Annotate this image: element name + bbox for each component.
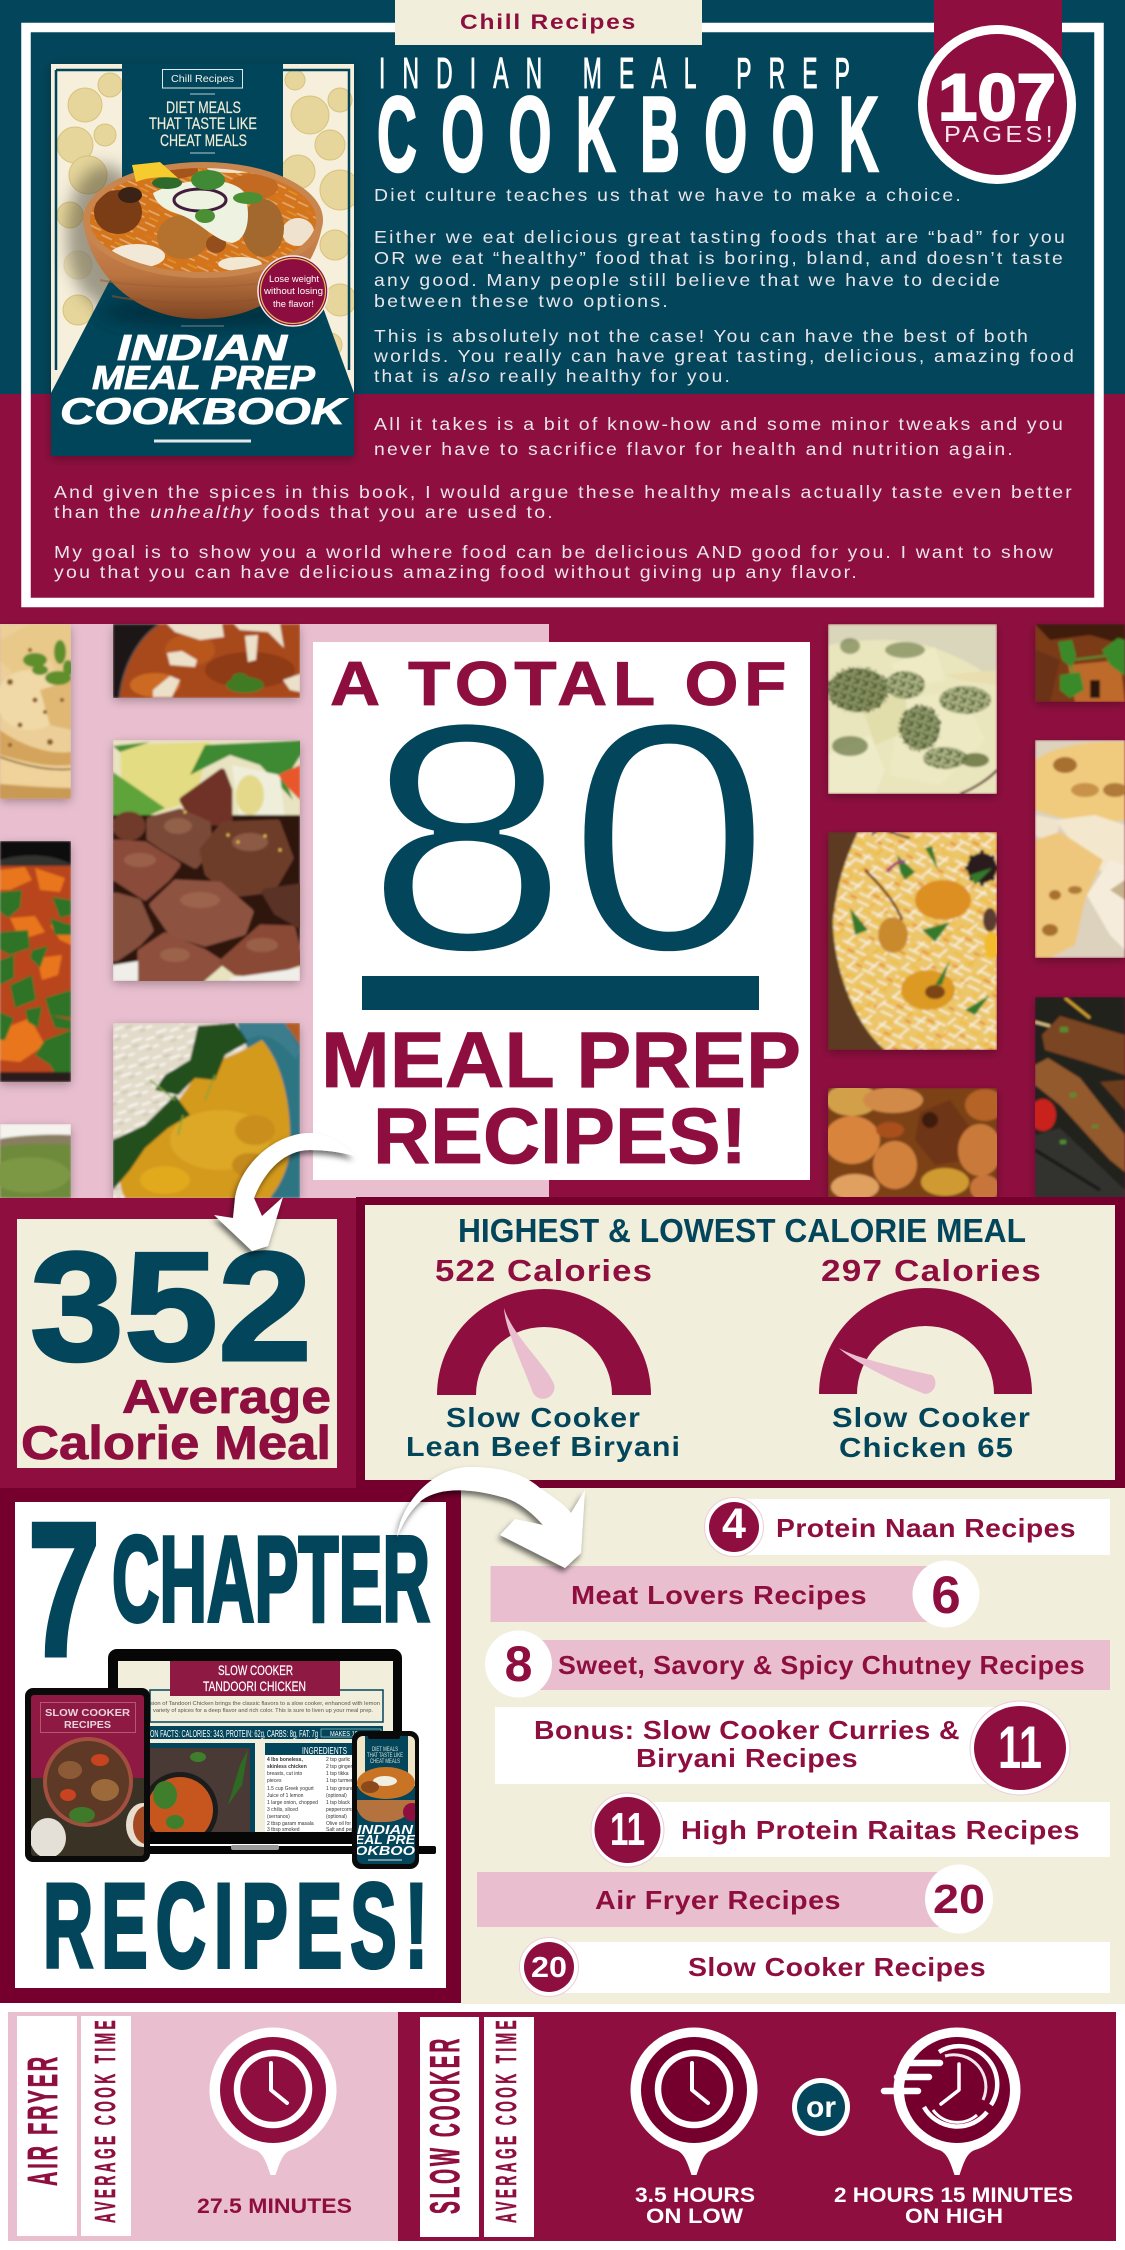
photo: dumplings with dill [826, 624, 997, 794]
arrow: recipes to average calories [214, 1133, 355, 1251]
tablet [25, 1688, 160, 1862]
row: bonus curries: 11 [998, 1714, 1042, 1781]
slow cooker side labels [420, 2017, 534, 2237]
laptop: (optional) [326, 1793, 347, 1799]
slow cooker high time [834, 2184, 1073, 2228]
photo: dal with rice [113, 1023, 300, 1198]
row: bonus curries: Biryani Recipes [636, 1743, 858, 1773]
laptop: 2 tsp ginger [326, 1764, 352, 1770]
average number: 352 [30, 1220, 312, 1393]
heading: meal prep recipes: RECIPES! [373, 1091, 747, 1180]
air fryer time: 27.5 MINUTES [197, 2195, 352, 2218]
panel: header introduction [0, 0, 1125, 624]
photo: biryani rice [828, 831, 1000, 1050]
row: meat lovers [490, 1560, 980, 1628]
photo: beef bites [113, 740, 310, 981]
intro copy: that is also really healthy for you. [374, 366, 732, 386]
cover tagline: DIET MEALS [166, 98, 241, 117]
intro copy: than the unhealthy foods that you are used to. [54, 502, 555, 522]
cover stamp: Lose weight [269, 274, 319, 285]
laptop: 2 tsp garlic [326, 1757, 351, 1763]
panel: average cook times [8, 2012, 1116, 2241]
panel: 7 chapter recipes [0, 1484, 461, 2003]
slow cooker low time: ON LOW [646, 2205, 743, 2228]
icon: fast clock pin [884, 2028, 1020, 2175]
photo: chicken 65 [824, 1084, 1005, 1201]
intro copy: you that you can have delicious amazing food without giving up any flavor. [54, 562, 859, 582]
photo: green chutney [0, 1124, 71, 1198]
infographic page: AVERAGE COOK TIME [491, 2017, 523, 2223]
laptop: 1 tsp ground [326, 1786, 354, 1792]
panel heading: HIGHEST & LOWEST CALORIE MEAL [458, 1212, 1026, 1249]
icon: low clock pin [630, 2028, 758, 2175]
brand tab [395, 0, 702, 45]
row: air fryer: Air Fryer Recipes [595, 1885, 841, 1915]
book cover [51, 64, 360, 456]
laptop: 4 lbs boneless, [267, 1757, 303, 1763]
phone: INDIAN [357, 1822, 414, 1837]
row: raitas: 11 [610, 1803, 645, 1855]
intro copy: Diet culture teaches us that we have to make a choice. [374, 185, 963, 205]
laptop: MAKES 10 SERV [330, 1731, 375, 1738]
icon: or badge [792, 2078, 850, 2136]
photo: dark curry [1035, 624, 1125, 702]
row: chutney: Sweet, Savory & Spicy Chutney Recipes [558, 1650, 1085, 1680]
gauge: highest: Slow Cooker [446, 1402, 641, 1433]
row: chutney: 8 [505, 1636, 532, 1692]
page count ribbon and badge: PAGES! [944, 121, 1056, 147]
laptop: 3 chilis, sliced [267, 1807, 298, 1813]
slow cooker low time: 3.5 HOURS [635, 2184, 755, 2207]
laptop: TANDOORI CHICKEN [203, 1678, 306, 1694]
heading: 7 chapter [28, 1484, 430, 1696]
laptop: 1 large onion, chopped [267, 1800, 318, 1806]
tablet: RECIPES [64, 1720, 111, 1731]
photo: paneer curry [0, 841, 71, 1082]
gauge: highest [406, 1253, 681, 1462]
row: raitas: High Protein Raitas Recipes [681, 1815, 1080, 1845]
laptop [108, 1649, 436, 1854]
panel: recipe total card [313, 642, 810, 1180]
row: chutney [485, 1630, 1110, 1698]
intro copy: My goal is to show you a world where food can be delicious AND good for you. I want to show [54, 542, 1055, 562]
phone: DIET MEALS [372, 1747, 398, 1753]
intro copy [54, 185, 1076, 582]
laptop: variety of spices for a deep flavor and rich color. This is sure to liven up your meal prep. [153, 1708, 373, 1714]
slow cooker high time: 2 HOURS 15 MINUTES [834, 2184, 1073, 2207]
panel: average calorie meal [0, 1198, 356, 1488]
title [377, 49, 903, 194]
cover title [62, 334, 350, 425]
intro copy: This is absolutely not the case! You can have the best of both [374, 326, 1030, 346]
average label [21, 1370, 331, 1469]
row: air fryer: 20 [933, 1876, 985, 1922]
cover stamp [258, 256, 328, 326]
device mockups [25, 1649, 436, 1869]
cover tagline: THAT TASTE LIKE [149, 114, 257, 133]
phone: CHEAT MEALS [370, 1759, 400, 1765]
row: slow cooker: Slow Cooker Recipes [688, 1952, 986, 1982]
laptop: Juice of 1 lemon [267, 1793, 304, 1799]
photo: cheese naan [1035, 740, 1125, 958]
intro copy: between these two options. [374, 291, 670, 311]
row: protein naan [704, 1498, 1110, 1556]
slow cooker high time: ON HIGH [905, 2205, 1003, 2228]
gauge: lowest: Slow Cooker [832, 1402, 1031, 1433]
page count ribbon and badge [922, 0, 1072, 180]
tablet: SLOW COOKER [45, 1708, 131, 1719]
brand tab: Chill Recipes [460, 11, 637, 34]
gauge: highest: 522 Calories [435, 1253, 653, 1288]
laptop: peppercorns [326, 1807, 354, 1813]
laptop: SLOW COOKER [218, 1662, 293, 1678]
row: protein naan: 4 [722, 1500, 746, 1548]
row: slow cooker: 20 [531, 1952, 567, 1984]
air fryer side labels: AIR FRYER [19, 2054, 66, 2186]
laptop: INGREDIENTS [302, 1746, 347, 1757]
laptop: 3 tbsp smoked [267, 1827, 300, 1833]
intro copy: any good. Many people still believe that we have to decide [374, 270, 1002, 290]
cover title: MEAL PREP [92, 359, 316, 396]
cover tagline: CHEAT MEALS [160, 131, 247, 150]
heading: meal prep recipes [321, 1015, 801, 1180]
page count ribbon and badge: 107 [938, 60, 1056, 134]
panel: recipe counts by chapter [461, 1488, 1125, 2004]
laptop: sion of Tandoori Chicken brings the classic flavors to a slow cooker, enhanced with lemon [150, 1701, 380, 1707]
arrow: chapters to recipe list [397, 1467, 585, 1568]
laptop: 1 tsp turmeric [326, 1778, 357, 1784]
laptop: 2 tbsp garam masala [267, 1821, 314, 1827]
heading: meal prep recipes: MEAL PREP [321, 1015, 801, 1104]
laptop: pieces [267, 1778, 282, 1784]
gauge: lowest [819, 1253, 1042, 1463]
average label: Calorie Meal [21, 1416, 331, 1469]
cover brand box: Chill Recipes [171, 74, 234, 85]
row: air fryer [477, 1864, 993, 1934]
laptop: 1 tsp tikka [326, 1771, 349, 1777]
phone: OKBOO [355, 1843, 415, 1858]
heading: recipes: RECIPES! [43, 1859, 436, 1993]
cover title: INDIAN [117, 327, 288, 368]
photo: butter curry [113, 624, 300, 698]
cover title: COOKBOOK [60, 391, 348, 432]
laptop: ON FACTS: CALORIES: 343, PROTEIN: 62g, CARBS: 8g, FAT: 7g [150, 1729, 318, 1740]
intro copy: never have to sacrifice flavor for health and nutrition again. [374, 439, 1015, 459]
photo: naan [0, 624, 73, 799]
gauge: lowest: 297 Calories [821, 1253, 1042, 1288]
panel: highest and lowest calorie meal [356, 1197, 1125, 1488]
phone: EAL PRE [355, 1832, 415, 1847]
photo: seekh kebabs [1030, 997, 1125, 1198]
intro copy: Either we eat delicious great tasting foods that are “bad” for you [374, 227, 1067, 247]
gauge: highest: Lean Beef Biryani [406, 1431, 681, 1462]
laptop: Olive oil for [326, 1821, 351, 1827]
cover stamp: without losing [263, 286, 323, 297]
row: protein naan: Protein Naan Recipes [776, 1513, 1076, 1543]
slow cooker low time [635, 2184, 755, 2228]
phone [352, 1731, 421, 1869]
big number 80: 80 [366, 656, 770, 1020]
infographic page: AVERAGE COOK TIME [90, 2017, 122, 2223]
laptop: 1.5 cup Greek yogurt [267, 1786, 314, 1792]
intro copy: All it takes is a bit of know-how and some minor tweaks and you [374, 414, 1065, 434]
panel: total recipes with food photo collage [0, 624, 1125, 1201]
row: bonus curries: Bonus: Slow Cooker Curries & [534, 1715, 960, 1745]
row: bonus curries [495, 1701, 1070, 1795]
intro copy: And given the spices in this book, I would argue these healthy meals actually taste even better [54, 482, 1074, 502]
heading: a total of: A TOTAL OF [330, 650, 792, 719]
cover brand box [162, 70, 242, 88]
row: slow cooker [520, 1938, 1110, 1996]
laptop: 1 tsp black [326, 1800, 350, 1806]
heading: 7 chapter: CHAPTER [112, 1511, 430, 1647]
laptop: breasts, cut into [267, 1771, 303, 1777]
cover tagline [149, 101, 256, 146]
intro copy: worlds. You really can have great tasting, delicious, amazing food [373, 346, 1076, 366]
laptop: skinless chicken [267, 1764, 307, 1770]
heading: 7 chapter: 7 [28, 1484, 100, 1696]
icon: or badge: or [806, 2091, 836, 2124]
row: meat lovers: Meat Lovers Recipes [571, 1580, 867, 1610]
gauge: lowest: Chicken 65 [839, 1432, 1014, 1463]
phone: THAT TASTE LIKE [367, 1753, 403, 1759]
bar under number [362, 976, 759, 1010]
row: meat lovers: 6 [931, 1566, 961, 1625]
row: raitas [591, 1793, 1110, 1867]
laptop: (serranos) [267, 1814, 290, 1820]
average label: Average [122, 1370, 331, 1423]
icon: air fryer clock pin [210, 2028, 336, 2175]
cover stamp: the flavor! [273, 299, 314, 310]
laptop: Salt and pepper [326, 1827, 362, 1833]
laptop: (optional) [326, 1814, 347, 1820]
intro copy: OR we eat “healthy” food that is boring, bland, and doesn’t taste [374, 248, 1065, 268]
cover bowl illustration [83, 161, 323, 328]
slow cooker side labels: SLOW COOKER [421, 2036, 468, 2214]
air fryer side labels [17, 2016, 131, 2236]
